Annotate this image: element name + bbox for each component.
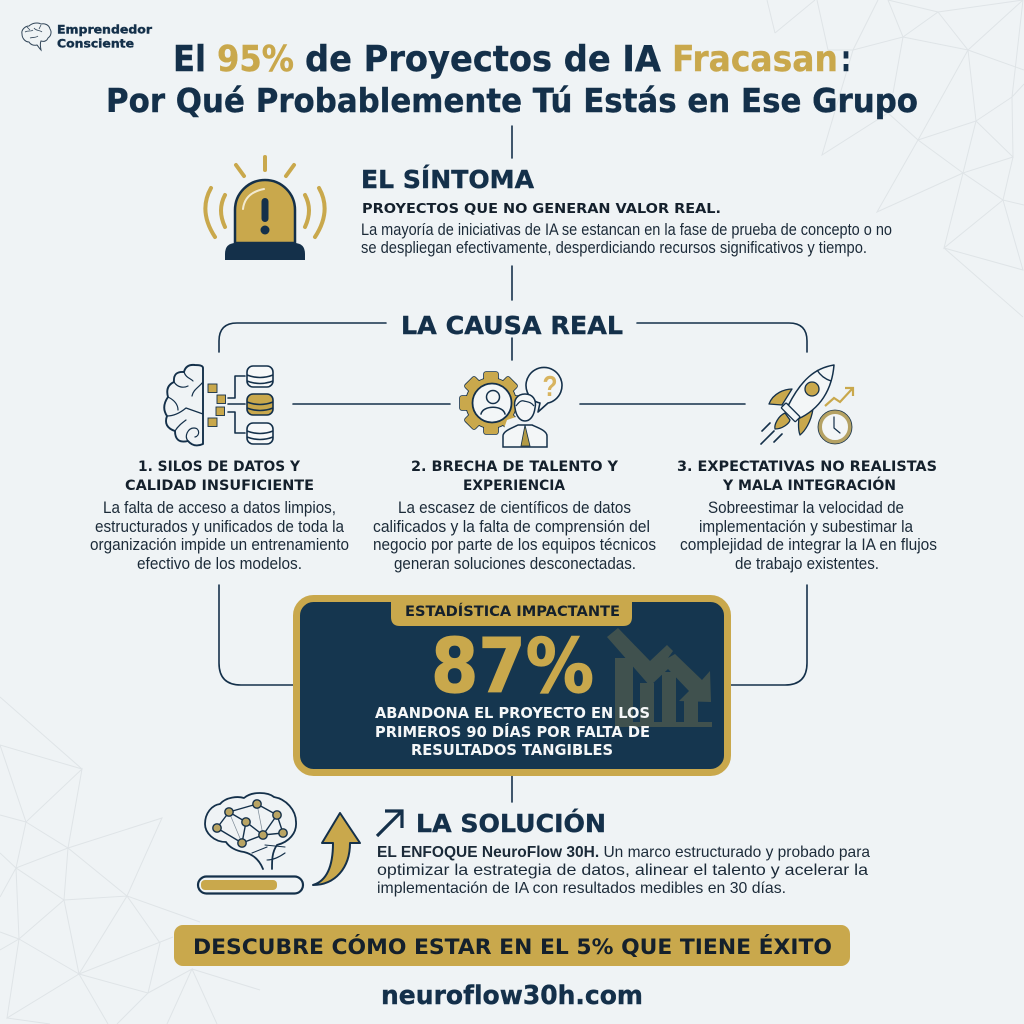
badge bbox=[391, 598, 632, 626]
logo: Emprendedor Consciente: Emprendedor bbox=[57, 22, 152, 36]
column 1: silos de datos: La falta de acceso a datos limpios, bbox=[103, 499, 336, 517]
column 2: brecha de talento: negocio por parte de los equipos técnicos bbox=[373, 536, 656, 554]
column 3: expectativas no realistas: 3. EXPECTATIVAS NO REALISTAS bbox=[677, 459, 937, 475]
title: Fracasan bbox=[672, 39, 838, 80]
website url: neuroflow30h.com bbox=[381, 981, 643, 1011]
call to action banner: DESCUBRE CÓMO ESTAR EN EL 5% QUE TIENE ÉXITO bbox=[193, 934, 832, 959]
column 3: expectativas no realistas: implementación y subestimar la bbox=[699, 518, 914, 536]
column 2: brecha de talento: 2. BRECHA DE TALENTO Y bbox=[411, 459, 619, 475]
connector lines bbox=[219, 126, 807, 802]
title: de Proyectos de IA bbox=[305, 39, 661, 80]
statistic caption bbox=[375, 704, 650, 759]
column 2: brecha de talento: generan soluciones desconectadas. bbox=[394, 555, 636, 573]
statistic caption: ABANDONA EL PROYECTO EN LOS bbox=[375, 704, 650, 722]
call to action banner bbox=[174, 925, 850, 966]
section: La solución: LA SOLUCIÓN bbox=[416, 808, 606, 838]
title: : bbox=[841, 39, 851, 80]
section: La solución: EL ENFOQUE NeuroFlow 30H. Un marco estructurado y probado para bbox=[377, 844, 870, 861]
statistic caption: RESULTADOS TANGIBLES bbox=[411, 741, 613, 759]
section: La solución: implementación de IA con resultados medibles en 30 días. bbox=[377, 880, 786, 897]
icon: brain with data silos bbox=[164, 365, 273, 445]
title bbox=[106, 39, 918, 120]
logo: Emprendedor Consciente: Consciente bbox=[57, 36, 134, 50]
panel: estadística impactante bbox=[296, 598, 728, 772]
statistic caption: PRIMEROS 90 DÍAS POR FALTA DE bbox=[375, 722, 650, 741]
column 2: brecha de talento: La escasez de científicos de datos bbox=[398, 499, 631, 517]
section: La solución bbox=[377, 808, 870, 897]
column 3: expectativas no realistas: complejidad de integrar la IA en flujos bbox=[680, 536, 937, 554]
icon: alarm siren bbox=[205, 157, 325, 260]
heading: La causa real: LA CAUSA REAL bbox=[401, 311, 623, 340]
icon: brain network with progress bar bbox=[198, 793, 360, 894]
column 2: brecha de talento bbox=[373, 459, 656, 573]
icon: rocket with clock bbox=[761, 365, 853, 444]
column 2: brecha de talento: calificados y la falta de comprensión del bbox=[373, 518, 650, 536]
column 3: expectativas no realistas bbox=[677, 459, 937, 573]
column 1: silos de datos bbox=[90, 459, 349, 573]
section: La solución: optimizar la estrategia de datos, alinear el talento y acelerar la bbox=[377, 862, 868, 879]
icon: gear, person and question bbox=[460, 367, 562, 448]
section: El síntoma: PROYECTOS QUE NO GENERAN VALOR REAL. bbox=[362, 201, 721, 217]
column 1: silos de datos: CALIDAD INSUFICIENTE bbox=[125, 478, 314, 494]
title: El bbox=[173, 39, 206, 80]
column 3: expectativas no realistas: Sobreestimar la velocidad de bbox=[708, 499, 904, 517]
column 1: silos de datos: 1. SILOS DE DATOS Y bbox=[138, 459, 301, 475]
logo: Emprendedor Consciente bbox=[22, 22, 152, 50]
badge: ESTADÍSTICA IMPACTANTE bbox=[405, 603, 620, 620]
section: El síntoma: La mayoría de iniciativas de IA se estancan en la fase de prueba de concepto o no bbox=[361, 221, 892, 239]
section: El síntoma: se despliegan efectivamente, desperdiciando recursos significativos y tiempo. bbox=[361, 239, 867, 257]
column 1: silos de datos: efectivo de los modelos. bbox=[137, 555, 302, 573]
column 3: expectativas no realistas: de trabajo existentes. bbox=[735, 555, 879, 573]
big number: 87% bbox=[431, 622, 594, 710]
title: Por Qué Probablemente Tú Estás en Ese Grupo bbox=[106, 81, 918, 120]
icon: trend arrow bbox=[377, 811, 402, 836]
section: El síntoma: EL SÍNTOMA bbox=[361, 165, 535, 194]
title: 95% bbox=[217, 39, 294, 80]
icon: gear, person and question: ? bbox=[542, 371, 558, 403]
chart: falling bars watermark bbox=[607, 628, 712, 727]
column 2: brecha de talento: EXPERIENCIA bbox=[463, 478, 565, 494]
section: El síntoma bbox=[361, 165, 892, 257]
column 1: silos de datos: organización impide un entrenamiento bbox=[90, 536, 349, 554]
column 3: expectativas no realistas: Y MALA INTEGRACIÓN bbox=[722, 476, 896, 494]
column 1: silos de datos: estructurados y unificados de toda la bbox=[95, 518, 345, 536]
